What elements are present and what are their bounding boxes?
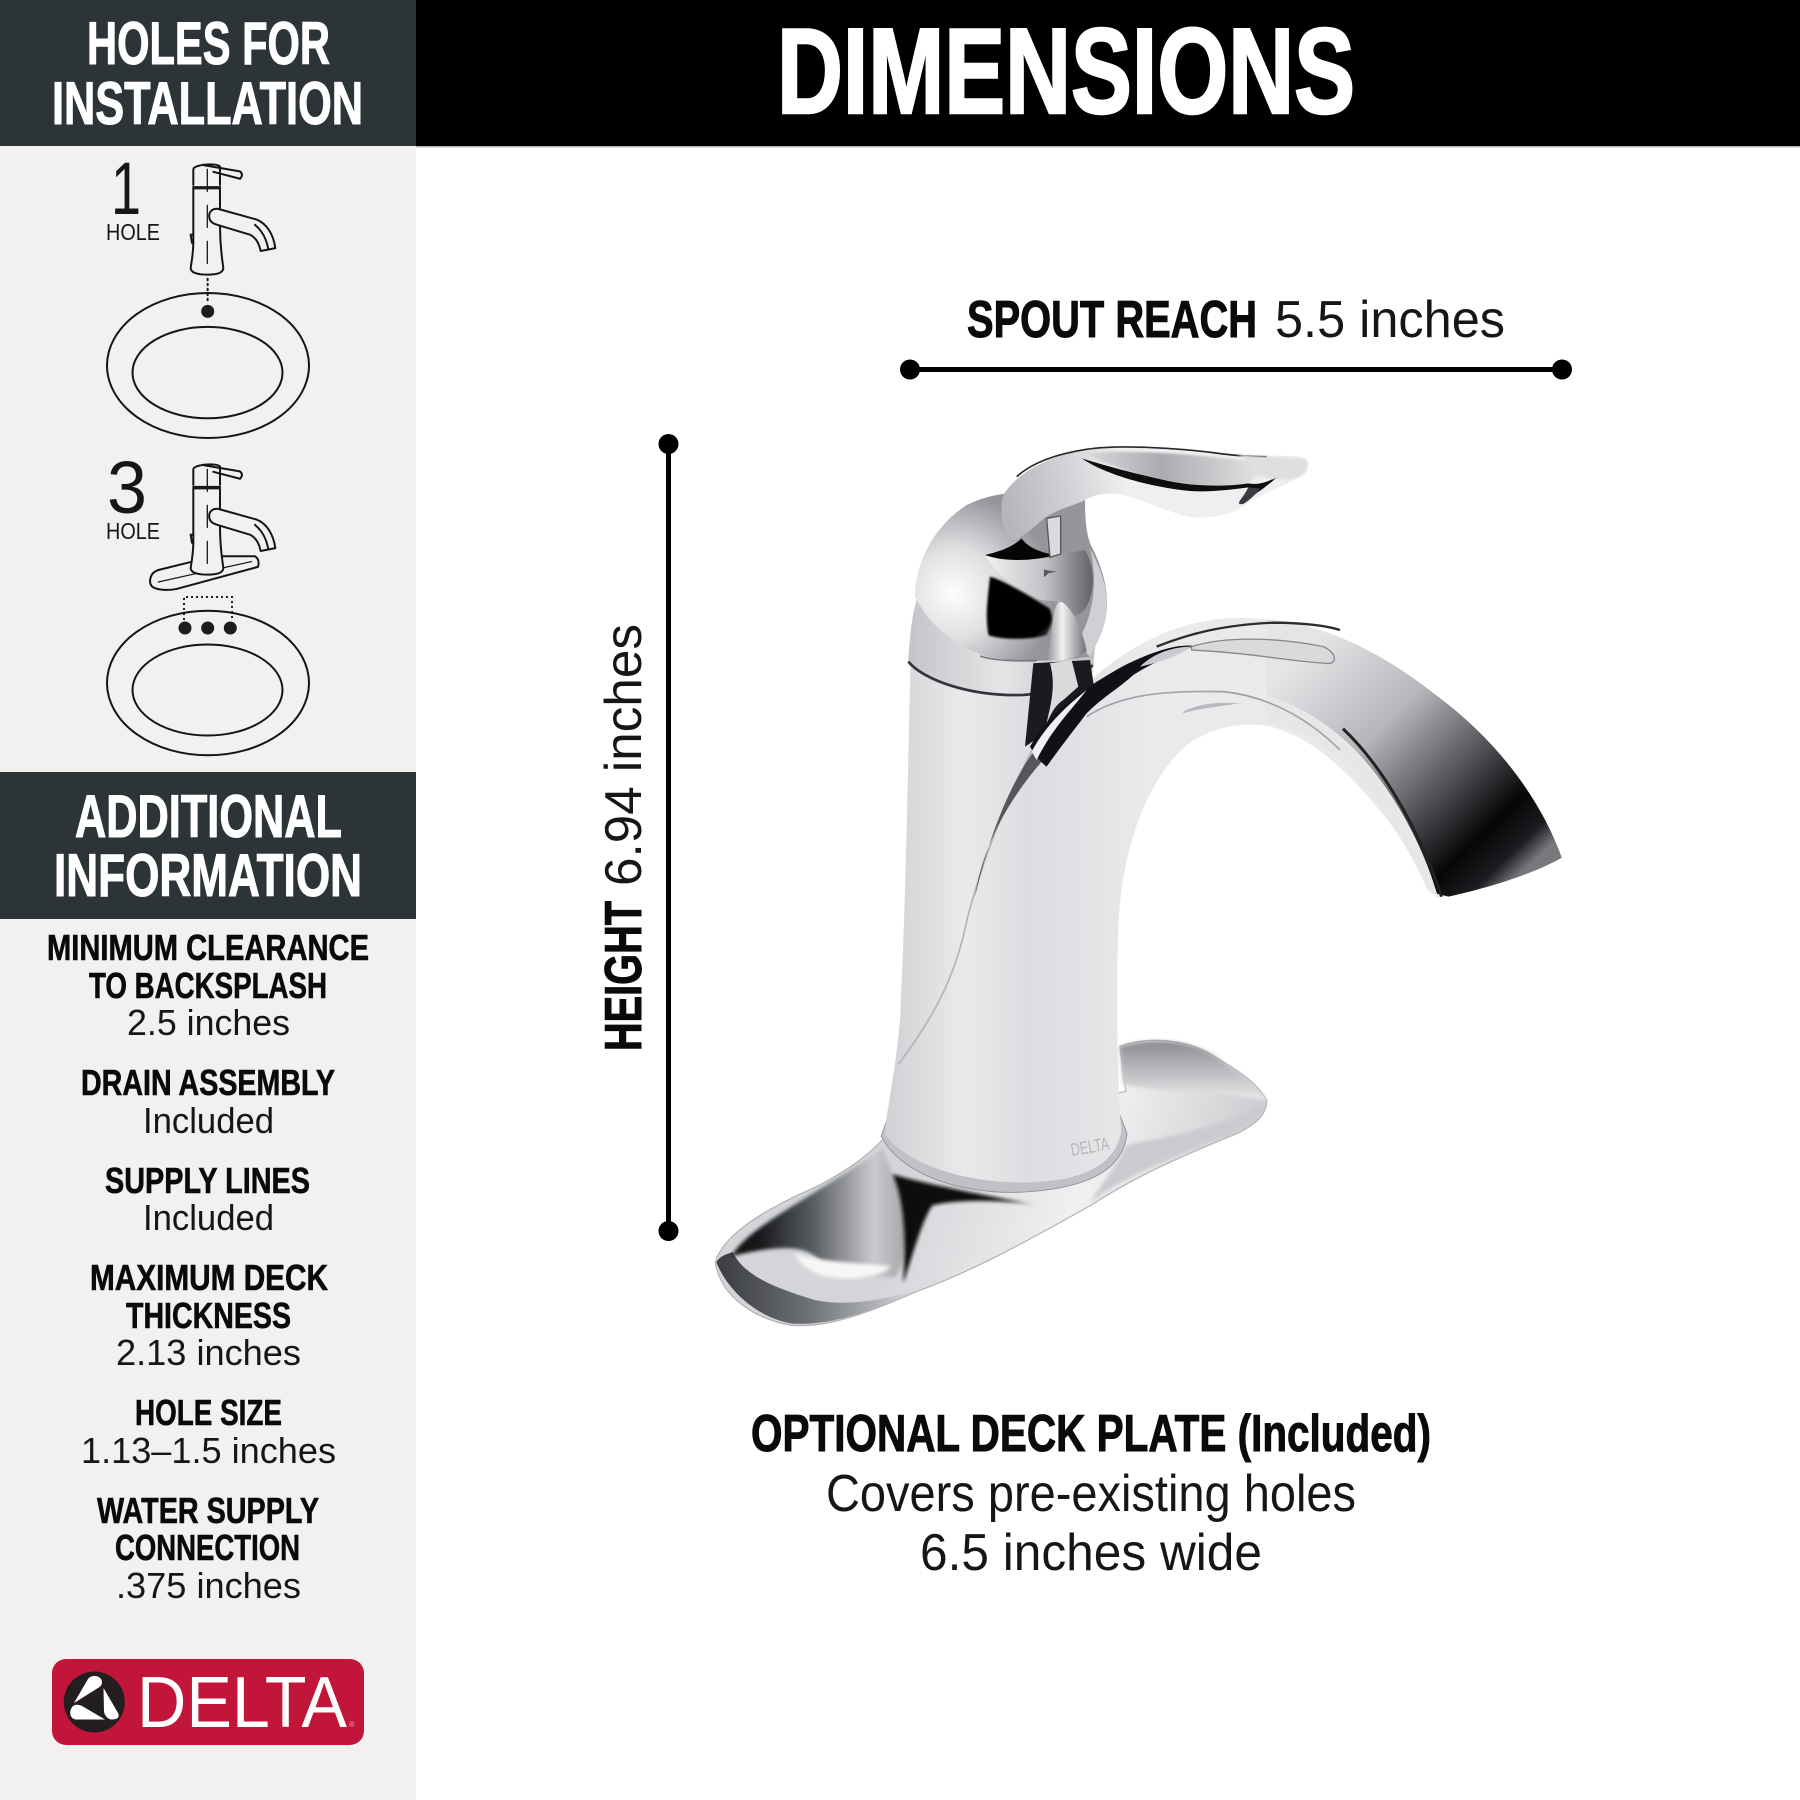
banner: dimensions title: DIMENSIONS <box>777 3 1355 139</box>
arrow: spout reach measure <box>900 360 1572 380</box>
spec: hole size: HOLE SIZE <box>135 1392 282 1433</box>
spout inner reflection <box>1183 703 1240 713</box>
spec: hole size <box>81 1392 336 1471</box>
logo: delta <box>52 1659 364 1745</box>
column collar <box>908 600 1097 695</box>
spout reflection <box>1140 647 1192 667</box>
spec: drain assembly: DRAIN ASSEMBLY <box>81 1062 335 1103</box>
label: height: HEIGHT <box>595 901 653 1051</box>
faucet upper body <box>908 446 1340 767</box>
collar seam line <box>908 662 1093 695</box>
spec: supply lines <box>105 1160 310 1238</box>
heading: holes for installation: HOLES FOR <box>87 10 330 77</box>
spec: drain assembly: Included <box>143 1100 274 1141</box>
dome shield <box>985 550 1093 615</box>
neck highlight <box>1047 660 1078 723</box>
spec: maximum deck thickness: THICKNESS <box>126 1295 291 1336</box>
spout inner line <box>1087 691 1340 750</box>
label: 3 hole: HOLE <box>106 518 160 544</box>
spec: maximum deck thickness: 2.13 inches <box>116 1332 301 1373</box>
icon: single hole faucet <box>191 164 275 303</box>
spec: water supply connection: .375 inches <box>116 1565 301 1606</box>
spec: maximum deck thickness: MAXIMUM DECK <box>90 1257 328 1298</box>
base engraving: DELTA <box>1069 1133 1111 1160</box>
spec: drain assembly <box>81 1062 335 1141</box>
spec: water supply connection <box>97 1490 319 1606</box>
base collar <box>881 1115 1127 1192</box>
label: height: 6.94 inches <box>595 624 653 886</box>
faucet lower body <box>715 618 1562 1326</box>
spout ribbon highlight <box>1032 690 1087 760</box>
panel: sidebar <box>0 0 416 1800</box>
dome dark spot <box>985 538 1057 560</box>
spec: supply lines: Included <box>143 1197 274 1238</box>
label: 1 hole: 1 <box>111 147 141 230</box>
caption: optional deck plate <box>751 1405 1431 1582</box>
icon: three hole faucet with plate <box>150 464 275 590</box>
dome lower shadow line <box>980 656 1037 661</box>
label: height <box>595 624 653 1051</box>
label: spout reach: SPOUT REACH <box>967 291 1257 349</box>
spout dark ribbon <box>1030 646 1195 767</box>
handle <box>1001 446 1308 540</box>
caption: optional deck plate: OPTIONAL DECK PLATE (Included) <box>751 1405 1431 1463</box>
spec: minimum clearance: MINIMUM CLEARANCE <box>47 927 369 968</box>
heading: additional information: INFORMATION <box>54 842 362 909</box>
deck plate <box>715 1040 1267 1326</box>
spout top edge <box>1157 623 1340 647</box>
stem detail <box>1047 516 1061 557</box>
body seam <box>898 750 1032 1064</box>
seam chrome <box>975 738 1055 897</box>
heading: additional information: ADDITIONAL <box>75 783 342 850</box>
spec: water supply connection: CONNECTION <box>115 1527 300 1568</box>
arrow: height measure <box>658 434 678 1241</box>
indicator dot <box>1044 569 1057 577</box>
faucet photo <box>715 446 1562 1326</box>
heading: holes for installation: INSTALLATION <box>52 70 363 137</box>
label: spout reach: 5.5 inches <box>1275 291 1505 349</box>
caption: optional deck plate: Covers pre-existing holes <box>826 1465 1356 1523</box>
label: 1 hole <box>106 147 160 245</box>
label: 3 hole: 3 <box>107 446 147 529</box>
dome black reflection <box>987 577 1052 639</box>
dome right band <box>1077 548 1107 657</box>
icon: single hole sink <box>107 293 309 438</box>
caption: optional deck plate: 6.5 inches wide <box>920 1524 1262 1582</box>
spec: hole size: 1.13–1.5 inches <box>81 1430 336 1471</box>
spec: supply lines: SUPPLY LINES <box>105 1160 310 1201</box>
logo: delta: DELTA <box>137 1663 347 1743</box>
spec: water supply connection: WATER SUPPLY <box>97 1490 319 1531</box>
spec: maximum deck thickness <box>90 1257 328 1373</box>
icon: three hole sink <box>107 597 309 755</box>
spout chrome <box>1267 619 1562 897</box>
label: 3 hole <box>106 446 160 544</box>
neck shadow <box>1025 660 1094 747</box>
teardrop lever <box>1046 602 1087 661</box>
logo: delta: ® <box>349 1720 355 1729</box>
spec: minimum clearance: TO BACKSPLASH <box>89 965 327 1006</box>
banner: dimensions title <box>416 0 1800 146</box>
spout slot <box>1192 639 1334 663</box>
label: 1 hole: HOLE <box>106 219 160 245</box>
spec: minimum clearance <box>47 927 369 1043</box>
spec: minimum clearance: 2.5 inches <box>127 1002 290 1043</box>
heading: holes for installation <box>0 0 416 146</box>
column and spout body <box>884 618 1562 1183</box>
dome <box>915 493 1107 661</box>
heading: additional information <box>0 772 416 919</box>
